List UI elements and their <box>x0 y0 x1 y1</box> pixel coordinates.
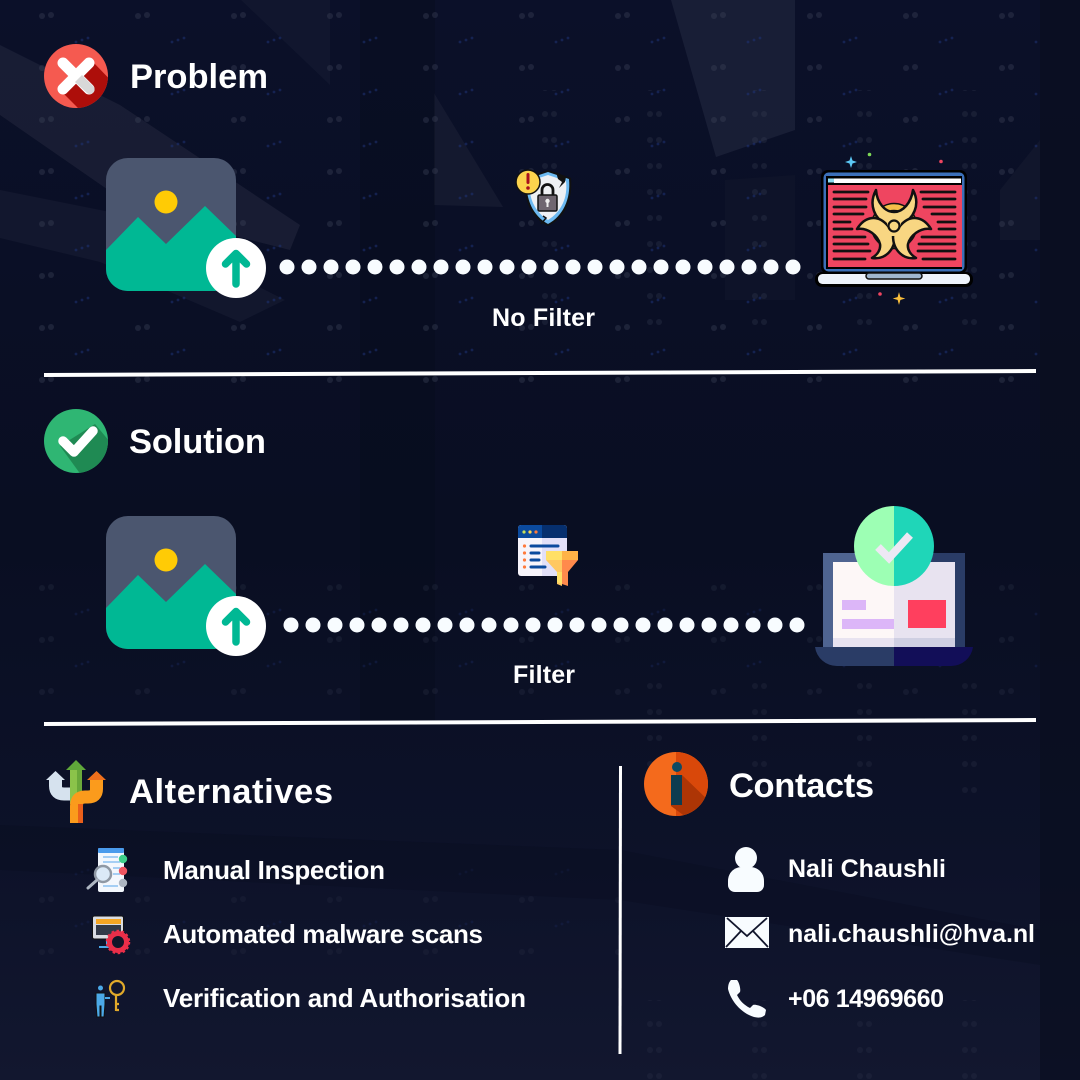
dotted connector: problem <box>280 260 800 274</box>
heading: Alternatives: Alternatives <box>129 773 333 811</box>
list: contacts <box>725 847 1035 1018</box>
item: name <box>728 847 946 892</box>
item: phone <box>728 980 944 1018</box>
heading: Solution: Solution <box>129 423 266 461</box>
heading: Alternatives <box>46 760 333 823</box>
divider: problem and solution <box>44 371 1036 375</box>
divider: vertical <box>618 766 622 1054</box>
item: email: nali.chaushli@hva.nl <box>788 920 1035 948</box>
list: alternatives <box>88 848 526 1017</box>
icon: broken shield with lock <box>516 170 571 226</box>
icon: laptop with check <box>815 506 973 666</box>
item: phone: +06 14969660 <box>788 985 944 1013</box>
label: No Filter: No Filter <box>492 304 595 332</box>
heading: Problem: Problem <box>130 58 268 96</box>
item: Verification and Authorisation: Verification and Authorisation <box>163 983 526 1013</box>
icon: red cross <box>44 44 108 108</box>
item: Manual Inspection <box>88 848 385 892</box>
icon: branching arrows <box>46 760 106 823</box>
heading: Problem <box>44 44 266 108</box>
icon: filter list <box>518 525 578 586</box>
icon: info <box>644 752 710 820</box>
icon: green check <box>44 409 108 473</box>
malware text lines <box>834 192 955 259</box>
icon: image upload (problem) <box>106 158 266 298</box>
heading: Solution <box>44 409 264 473</box>
item: Manual Inspection: Manual Inspection <box>163 855 385 885</box>
dotted connector: solution <box>284 618 804 632</box>
biohazard symbol <box>857 190 931 258</box>
heading: Contacts: Contacts <box>729 767 874 805</box>
item: Automated malware scans <box>92 916 483 953</box>
icon: image upload (solution) <box>106 516 266 656</box>
item: name: Nali Chaushli <box>788 855 946 883</box>
divider: solution and lower section <box>44 720 1036 724</box>
label: Filter: Filter <box>513 661 575 689</box>
heading: Contacts <box>644 752 874 820</box>
icon: laptop with biohazard <box>815 153 973 303</box>
sparkles <box>845 156 857 168</box>
item: Automated malware scans: Automated malware scans <box>163 919 483 949</box>
